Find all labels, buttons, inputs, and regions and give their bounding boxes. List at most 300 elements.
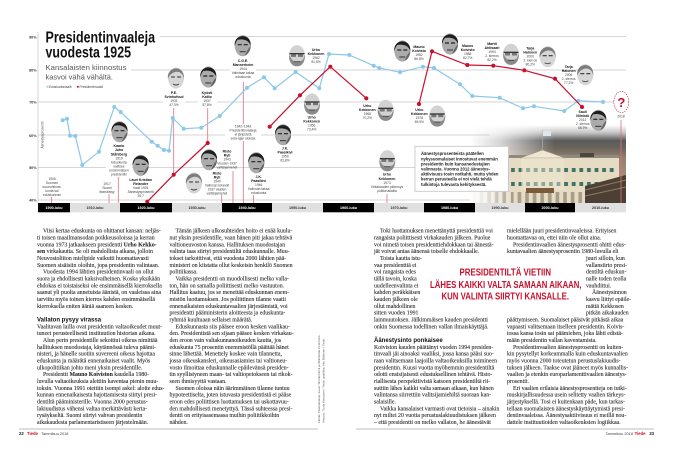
portrait: Ryti 1943 (201, 149, 217, 170)
label: Ryti 1943: Vuoden 1937 (217, 162, 237, 166)
article column 2: den eroon vain valtakunnanoikeuden kautta, jos (170, 338, 282, 344)
portrait: Kekkonen 1973 (379, 150, 395, 171)
label: Ryti 1943: Risto (223, 150, 231, 154)
article column 2: Tämän jälkeen ulkosuhteiden hoito ei enää kuulu- (176, 229, 292, 235)
label: Halonen 2000: 80,2% (526, 62, 535, 66)
chart: turnout grid and axis: 80% (29, 68, 37, 72)
portrait: Relander (133, 155, 149, 176)
article column 4: päättymiseen. Suomalaiset pääsivät pitkästä aikaa (507, 318, 624, 324)
photo: presidential palace (470, 125, 626, 203)
label: Niinistö: 68,9% (578, 126, 587, 130)
article column 2: Suomen oloissa näin äärimmäinen tilanne tuntuu (176, 386, 290, 392)
article column 2: jossa oikeuskansleri, oikeusasiamies tai valtioneu- (168, 358, 287, 364)
label: Ståhlberg: Kaarlo (114, 144, 124, 148)
label: Kekkonen 1962: Urho (312, 48, 320, 52)
portrait: Ahtisaari (503, 44, 519, 65)
label: Halonen 2000: 2000 (527, 54, 534, 58)
article column 4: järjestyksellä. Tosi ei kuitenkaan päde, kun tarkas- (506, 400, 625, 406)
portrait: Svinhufvud (168, 67, 184, 89)
footer: right page: Tammikuu 2018 (606, 431, 633, 436)
label: Koivisto 1982: 86,8% (414, 57, 424, 61)
timeline: decades: 1980-luku (441, 206, 459, 210)
label: Kekkonen 1968 (359, 104, 376, 120)
label: Kekkonen 1956: 73,4% (307, 127, 316, 131)
footer: left page (19, 429, 318, 436)
article column 4: juuri silloin, kun (585, 256, 625, 262)
article column 3: Toista kautta istu- (380, 256, 422, 262)
label: 1906: suurruhtinas- (42, 185, 62, 189)
title: vuodesta 1925 (46, 45, 131, 62)
article column 2: valinta taas siirtyi presidentiltä eduskunnalle. Muu- (170, 249, 290, 255)
chart: turnout grid and axis (29, 32, 626, 203)
article column 3: voi nimetä toisen presidenttiehdokkaan tai äänestä- (374, 242, 494, 248)
label: Niinistö: 2. kierros (576, 122, 590, 126)
label: Relander: Relander (133, 182, 149, 186)
portrait: Halonen 2000 (540, 46, 556, 67)
callout: presidentin kuin kansanedustajien (421, 161, 490, 166)
chart: turnout grid and axis: 40% (29, 198, 37, 202)
pull quote: KUN VALINTA SIIRTYI KANSALLE. (442, 292, 569, 303)
article column 3: suttiin lähes kaikki valta samaan aikaan, kun hänen (374, 386, 494, 392)
article column 1: luvulla valtaoikeuksia alettiin kaventaa pienin muu- (37, 379, 158, 385)
article column 1: tuneet perusteellisesti instituution historian aikana. (37, 331, 156, 337)
label: Paasikivi 1950: J.K. (282, 146, 288, 150)
article column 4: vauhdittui. (586, 283, 612, 289)
article column 3: ollut mahdollinen (374, 304, 415, 310)
label: 1906: Suomen (46, 181, 58, 185)
label: Kekkonen 1962: 1962 (312, 56, 320, 60)
timeline: decades: 1960-luku (340, 206, 358, 210)
callout: nykysuomalaiset innostuvat enemmän (421, 156, 498, 161)
label: Koivisto 1988: Mauno (462, 44, 473, 48)
label: Kekkonen 1973: Urho (383, 172, 391, 176)
article column 1: suora ja ehdollisesti kaksivaiheinen. Koska yksikään (37, 276, 160, 282)
portrait: Kallio (200, 66, 216, 88)
callout: kerran perusteella ei voi vielä tehdä (421, 177, 492, 182)
article column 4: Presidentinvaalien äänestysprosentti on kuiten- (513, 345, 623, 351)
article column 4: mään presidentin vallan kaventamista. (507, 338, 597, 344)
article column 1: kunnan ennenaikaisesta hajottamisesta siirtyi presi- (37, 393, 157, 399)
article column 1: kierroksella eniten ääniä saaneen kesken. (37, 304, 134, 310)
article column 3: tällä tavoin, koska (374, 276, 417, 282)
label: Kekkonen 1978 (411, 108, 428, 124)
label: Relander: Lauri Kristian (129, 178, 152, 182)
article column 4: vapaasti valitsemaan itselleen presidentin. Koivis- (507, 324, 624, 330)
label: Ryti 1940: Valinnan tekevät (205, 183, 229, 187)
label: Niinistö: Niinistö (576, 114, 589, 118)
pull quote: LÄHES KAIKKI VALTA SAMAAN AIKAAN, (430, 278, 582, 291)
article column 4: dentinvaaleissa. Äänestysaktiivisuus ei meillä nou- (507, 412, 626, 419)
label: Ahtisaari: Ahtisaari (485, 46, 500, 50)
chart: turnout grid and axis: 70% (29, 100, 37, 104)
label: Kekkonen 1968: 1968 (364, 112, 371, 116)
image credit: Lähde: Tilastokeskus, kuvat: Shutterstock ja Wikimedia Commons. (317, 334, 321, 423)
article column 4: kuntavaalien äänestysprosentin 1980-luvulla eli (507, 249, 619, 255)
label: 1942-1943 no elections: ei järjestetä (235, 132, 252, 136)
label: Halonen 2006: Halonen (562, 69, 576, 73)
label: Koivisto 1982: 1982 (415, 53, 423, 57)
article column 3: riallisesta perspektiivistä katsoen presidentiltä rii- (374, 379, 490, 385)
legend (47, 85, 103, 89)
article column 2 (168, 229, 294, 426)
icon: question mark for 2018: 2018 (617, 114, 625, 118)
label: Kekkonen 1973: poikkeuslailla (377, 189, 397, 193)
article column 4: tuksen jälkeen. Taakse ovat jääneet myös kunnallis- (507, 365, 628, 371)
article column 4: Äänestysinnon (592, 289, 627, 296)
label: Kekkonen 1956: 1956 (308, 123, 316, 127)
pull quote (430, 266, 582, 303)
article column 3: Vaikka kansalaiset varmasti ovat tietoisia – ainakin (380, 406, 500, 412)
label: 1917: 1917 (103, 182, 111, 186)
article column 1 (37, 229, 164, 426)
label: 1917: itsenäistyy (99, 190, 115, 194)
label: 1942-1943 no elections (225, 124, 261, 141)
label: Ståhlberg: Ståhlberg (111, 152, 127, 156)
label: Ryti 1940: valitsijamiehet (207, 191, 227, 195)
article column 4: dentiltä eduskun- (586, 270, 626, 276)
article column 4: huomattavaa on, ettei niin ole ollut aina. (507, 236, 602, 242)
label: Niinistö: Sauli (579, 110, 587, 114)
article column 2: ministeri on kiistatta ollut keskeisin henkilö Suomen (170, 263, 293, 269)
article column 2: seen ihmisyyttä vastaan. (170, 379, 227, 385)
label: Svinhufvud: 1931 (170, 99, 178, 103)
label: Niinistö: 2012 (579, 118, 587, 122)
article column 3: rangaista poliittisesti virkakauden jälkeen. Puolue (374, 236, 491, 242)
article column 3: onkin Suomessa todellinen vallan ilmaiskäyttäjä. (374, 324, 489, 330)
article column 3: presidentin. Kuusi vuotta myöhemmin presidentiltä (374, 365, 495, 371)
label: 1917: Suomi (102, 186, 112, 190)
article column 2: ryhmiä kuultuaan sellaiset määrätä. (170, 318, 253, 324)
pull quote: PRESIDENTILTÄ VIETIIN (460, 266, 551, 279)
label: Ståhlberg: 1919 (115, 156, 123, 160)
label: Ståhlberg (106, 143, 132, 176)
article column 3: Toki luottamuksen menettänyttä presidenttiä voi (380, 229, 493, 235)
label: Koivisto 1982: Mauno (413, 45, 425, 49)
timeline: decades (38, 203, 626, 212)
article column 3: Äänestysinto ponkaisee (374, 337, 443, 344)
label: Mannerheim: Valintaan takaa (232, 71, 254, 75)
footer: left page: 22 (19, 431, 24, 436)
article column 2: mistön luottamuksen. Jos poliittinen tilanne vaatii (170, 297, 286, 303)
label: Kekkonen 1956: Kekkonen (303, 119, 320, 123)
label: Svinhufvud: 47,3% (169, 103, 179, 107)
label: Kekkonen 1962 (308, 48, 324, 64)
label: Svinhufvud: P.E. (171, 91, 177, 95)
label: Relander (128, 178, 154, 198)
label: Paasikivi 1950: 63,8% (280, 158, 290, 162)
footer: right page: 23 (649, 431, 655, 436)
label: Kekkonen 1973: Virkakauden pidennys (371, 185, 404, 189)
article column 3: jät voivat antaa äänensä toiselle ehdokkaalle. (373, 249, 480, 255)
article column 2: vosto ilmoittaa eduskunnalle epäilevänsä presiden- (170, 365, 289, 371)
article column 3: nyt miltei 20 vuotta perustuslakiuudistuksen jälkeen (374, 413, 496, 419)
portrait: Ryti 1940 (186, 172, 202, 194)
portrait: Koivisto 1982 (394, 40, 410, 62)
timeline: decades: 1970-luku (390, 206, 408, 210)
label: Mannerheim: C.G.E. (238, 59, 248, 63)
article column 1: ehdokas ei toistaiseksi ole ensimmäisellä kierroksella (37, 283, 162, 289)
label: 1942-1943 no elections: Presidentinvaaleja (230, 128, 257, 132)
timeline: decades: 2000-luku (541, 206, 559, 210)
article column 2: valtioneuvoston kanssa. Hallituksen muodostajan (170, 242, 285, 248)
article column 2: ennenaikaisten eduskuntavaalien järjestämistä, voi (170, 304, 288, 310)
footer: right page: Tiede (635, 431, 646, 436)
article column 2: den mahdollisesti menetyttyä. Tässä suhteessa presi- (170, 406, 292, 412)
article column 4 (506, 229, 631, 426)
label: Ahtisaari (485, 42, 500, 62)
article column 2: politiikassa. (170, 270, 198, 276)
label: Ryti 1940: 1937 vaalien (208, 187, 227, 191)
article column 2: presidentti pääministerin aloitteesta ja eduskunta- (170, 311, 285, 317)
label: Svinhufvud: Svinhufvud (164, 95, 184, 99)
article column 3: vaa presidenttiä ei (374, 263, 417, 269)
label: Relander: Äänestysprosentti (128, 190, 154, 194)
label: Kekkonen 1978: Urho (415, 108, 423, 112)
portrait: Kekkonen 1978 (429, 105, 445, 127)
label: Paasikivi 1950: 1950 (281, 154, 289, 158)
timeline: decades: 1990-luku (491, 206, 509, 210)
article column 4: mättä Kekkosen (586, 304, 624, 310)
label: Relander: Vaali 1925 (133, 186, 149, 190)
label: Kekkonen 1962: 81,5% (311, 60, 321, 64)
subtitle: Kansalaisten kiinnostus (46, 63, 127, 72)
label: Ryti 1943: Ryti (224, 154, 230, 158)
title (46, 30, 155, 62)
label: Halonen 2000: Tarja (526, 46, 534, 50)
article column 4: prosentit. (507, 379, 529, 385)
timeline: decades: 1930-luku (188, 206, 206, 210)
label: 1906: kunta sai (45, 189, 59, 193)
portrait: Mannerheim (235, 35, 251, 56)
article column 3: uudelleenvalinta ei (374, 283, 419, 289)
article column 2: eduskunta 75 prosentin enemmistöllä päättää hänet (170, 345, 289, 351)
label: Koivisto 1988: Koivisto (461, 48, 475, 52)
label: 1906 (42, 177, 62, 197)
callout: aktiivisuus tosin notkahti, mutta yhden (421, 172, 499, 177)
label: Kekkonen 1968: Kekkonen (359, 108, 376, 112)
article column 2: Hallitus kaatuu, jos se menettää eduskunnan enem- (170, 290, 289, 296)
article column 1: Vuodesta 1994 lähtien presidentinvaali on ollut (43, 270, 154, 276)
article column 3: raan valitsemaan laajoilla valtaoikeuksilla toimineen (374, 358, 497, 364)
label: Kallio: Kallio (202, 95, 212, 99)
article column 1: Viisi kertaa eduskunta on ohittanut kansan: neljäs- (43, 229, 161, 235)
article column 2: tin syyllistyneen maan- tai valtiopetokseen tai rikok- (170, 372, 293, 378)
label: Mannerheim: Mannerheim (233, 63, 253, 67)
label: Paasikivi 1946: Paasikivi (251, 179, 266, 183)
article column 4: tossa kansa tosin sai päämiehen, joka lähti edistä- (507, 331, 623, 337)
label: Paasikivi 1946: eduskunta (251, 191, 266, 195)
label: Ryti 1943: 1943 (223, 158, 231, 162)
label: Paasikivi 1950: Paasikivi (278, 150, 293, 154)
article column 4: pitkän aikakauden (586, 311, 629, 317)
article column 3: – että presidentti on melko vallaton, he äänestävät (373, 420, 491, 426)
callout (415, 146, 508, 191)
image credit (317, 334, 326, 423)
line: presidential election turnout (145, 49, 584, 204)
article column 4: Eri vaalien erilaisia äänestysprosentteja on tutki- (513, 386, 627, 392)
timeline: decades: 1910-luku (86, 206, 104, 210)
event ticks (52, 82, 621, 203)
article column 2: sinne lähettää. Menettely koskee vain tilannetta, (170, 352, 282, 358)
label: Halonen 2006: 77,2% (564, 81, 573, 85)
label: Paasikivi 1946: Valinnan takaa (248, 187, 270, 191)
label: Koivisto 1982: Koivisto (412, 49, 426, 53)
label: 1906: 1906 (48, 177, 56, 181)
article column 1: ti toisen maailmansodan poikkeusoloissa ja kerran (37, 236, 155, 242)
label: Niinistö (576, 110, 590, 130)
article column 4: myös vuonna 2000 toteutetun perustuslakiuudis- (507, 358, 621, 364)
label: Koivisto 1988: 82,7% (463, 56, 472, 60)
label: Mannerheim: eduskunta (235, 75, 251, 79)
article column 1: nisteri, ja hänelle suotiin suvereeni oikeus hajottaa (37, 352, 155, 358)
timeline: decades: 1940-luku (238, 206, 256, 210)
article column 1: saanut yli puolta annetuista äänistä, on vaaleissa aina (37, 290, 161, 296)
label: Paasikivi 1946 (248, 175, 270, 195)
label: Halonen 2006 (562, 65, 576, 85)
timeline: decades: 1950-luku (289, 206, 307, 210)
article column 4: kasvu liittyi epäile- (586, 297, 631, 303)
label: Ahtisaari: 1994 (488, 50, 496, 54)
label: Ahtisaari: 82,2% (487, 58, 497, 62)
article column 1: Presidentti Mauno Koiviston kaudella 1980- (43, 372, 149, 378)
label: Ståhlberg: ensimmäisen (109, 168, 129, 172)
label: 1942-1943 no elections: 1942–1943 (235, 124, 251, 128)
article column 3: salaisille. (374, 400, 396, 406)
label: Halonen 2006: 2006 (565, 73, 573, 77)
timeline: decades: 1900-luku (45, 206, 63, 210)
label: Mannerheim (230, 58, 256, 80)
article column 4: muskirjallisuudessa usein selitetty vaalien tärkeys- (507, 393, 626, 399)
label: Ryti 1943: valitsijamiehet (217, 166, 237, 170)
label: Ståhlberg: Eduskunta (111, 160, 127, 164)
article column 2: eroon edes poliittisen luottamuksen tai uskottavuu- (170, 400, 289, 406)
label: Kekkonen 1978: Kekkonen (411, 112, 428, 116)
article column 3: odotti ensisijaisesti edustuksellinen tehtävä. Histo- (374, 372, 492, 378)
chart: turnout grid and axis: 60% (29, 134, 37, 138)
icon: question mark for 2018 (614, 92, 629, 118)
label: Ståhlberg: valitsee (113, 164, 125, 168)
label: Ryti 1940: Risto (213, 171, 221, 175)
portrait: Ståhlberg (111, 121, 128, 142)
callout: tulkintoja tulevasta kehityksestä. (421, 182, 486, 187)
label: Koivisto 1988 (461, 44, 475, 60)
label: Kekkonen 1973 (371, 172, 404, 193)
article column 4: mielellään juuri presidentinvaaleissa. Erityisen (507, 229, 616, 235)
article column 2: nähden. (170, 420, 188, 426)
article column 1: Vallaton pysyy virassa (37, 318, 102, 324)
article column 1: Suomen sisäisiin oloihin, jopa presidentin valintaan. (37, 263, 160, 269)
label: Kallio (198, 90, 217, 107)
label: Halonen 2000: 2. kierros (524, 58, 537, 62)
article column 1: toksin. Vuonna 1991 otettiin isompi askel: aloite edus- (37, 386, 164, 392)
legend: Eduskuntavaalit (49, 85, 72, 89)
label: Kekkonen 1973: Kekkonen (379, 177, 395, 181)
article column 1: ulkopolitiikan johto meni yksin presidentille. (37, 365, 143, 371)
article column 1: sen virkakautta. Se oli mahdollista aikana, jolloin (37, 249, 153, 255)
label: Kekkonen 1968: 70,2% (363, 116, 372, 120)
footer: right page (356, 429, 655, 436)
label: Kallio: 57,8% (202, 103, 212, 107)
portrait: Paasikivi 1950 (275, 124, 291, 145)
portrait: Halonen 2006 (577, 64, 593, 85)
article column 1: Vaalitavan lailla ovat presidentin valtaoikeudet muut- (37, 324, 162, 330)
label: Paasikivi 1946: J.K. (255, 175, 262, 179)
image credit: Antonio: Tuula Kinnunen / Tiede, grafiikka: Aku Mäkinen / Tiede (322, 339, 326, 423)
article column 2: ton, hän on samalla poliittisesti melko vastuuton. (170, 283, 285, 289)
portrait: Niinistö (590, 110, 606, 131)
article column 1: rysäykseltä. Suomi siirtyi vahvan presidentin (37, 413, 142, 419)
article column 3: valintansa siirrettiin valitsijamiehiltä suoraan kan- (374, 393, 491, 399)
label: Kekkonen 1978: 69,9% (415, 120, 424, 124)
article column 3: voi rangaista edes (374, 270, 417, 276)
label: Kekkonen 1973: 1973 (383, 181, 391, 185)
article column 1: dentiltä pääministerille. Vuonna 2000 perustus- (37, 400, 148, 406)
label: Ryti 1940: 1940 (213, 179, 221, 183)
article column 3: sitten vuoden 1991 (374, 311, 419, 317)
article column 4: tellaan suomalaisten äänestyskäyttäytymistä presi- (507, 406, 625, 412)
label: 1942-1943 no elections: sota-ajan oloissa (231, 136, 256, 140)
article column 3: kauden jälkeen ole (374, 297, 418, 303)
label: Svinhufvud (163, 90, 185, 107)
label: Halonen 2000 (523, 46, 537, 66)
article column 1: lakiuudistus vähensi valtaa merkittävästi kerta- (37, 406, 147, 412)
label: Kekkonen 1968: Urho (363, 104, 371, 108)
portrait: Kekkonen 1968 (378, 100, 394, 121)
article column 2: nut yksin presidentille, vaan hänen piti jakaa tehtävä (170, 236, 293, 242)
label: Halonen 2006: Tarja (565, 65, 573, 69)
timeline: decades: 1920-luku (137, 206, 155, 210)
portrait: Paasikivi 1946 (248, 152, 264, 173)
article column 2: tokset tarkoittivat, että vuodesta 2000 lähtien pää- (170, 256, 286, 262)
label: Ryti 1943 (217, 150, 237, 170)
footer: left page: Tammikuu 2018 (41, 431, 68, 436)
article column 3: tinvaali jäi ainoaksi vaaliksi, jossa kansa pääsi suo- (374, 352, 494, 358)
chart: turnout grid and axis: 50% (29, 166, 37, 170)
article column 4: vallansiirto presi- (586, 263, 627, 269)
label: Halonen 2006: 2. kierros (562, 77, 576, 81)
line: parliamentary election turnout (61, 52, 605, 167)
timeline: decades: 2010-luku (592, 206, 610, 210)
label: Koivisto 1982 (412, 45, 426, 61)
chart: turnout grid and axis: Äänestysprosentti (40, 121, 44, 148)
subtitle (46, 63, 127, 82)
article column 3: lainmuutoksen. Jälkimmäisen kauden presidentti (374, 318, 488, 324)
label: Halonen 2000: Halonen (523, 50, 537, 54)
portrait: Kekkonen 1962 (289, 45, 305, 66)
label: Paasikivi 1950 (278, 146, 293, 162)
label: Ahtisaari: Martti (487, 42, 497, 46)
portrait: Koivisto 1988 (442, 33, 458, 55)
label: Relander: 39,7 (137, 194, 144, 198)
label: Ståhlberg: presidentin (111, 172, 127, 176)
article column 4: vaalien ja etenkin europarlamenttivaalien äänestys- (507, 372, 627, 378)
article column 3 (373, 229, 500, 426)
label: Ahtisaari: 2. kierros (485, 54, 499, 58)
label: Kallio: Kyösti (202, 91, 212, 95)
article column 1: eduskunta ja määrätä ennenaikaiset vaalit. Myös (37, 358, 151, 364)
portrait: Kekkonen 1956 (304, 93, 320, 115)
article column 1: Alun perin presidentille sekoittui oikeus nimittää (43, 338, 158, 344)
label: Paasikivi 1946: 1946 (255, 183, 263, 187)
footer: left page: Tiede (27, 431, 39, 436)
label: 1906: eduskunnan (43, 193, 61, 197)
article column 2: dentti on erityisasemassa muihin poliitikkoihin (170, 413, 279, 419)
article column 1: aikakaudesta parlamentaristiseen järjestelmään. (37, 420, 149, 426)
article column 2: Vaikka presidentti on muodollisesti melko valla- (176, 276, 289, 282)
article column 1: hallituksen muodostaja, käytännössä tuleva päämi- (37, 345, 156, 351)
article column 4: nalle toden teolla (586, 276, 627, 282)
article column 3: Koiviston kauden päättänyt vuoden 1994 presiden- (374, 345, 493, 351)
